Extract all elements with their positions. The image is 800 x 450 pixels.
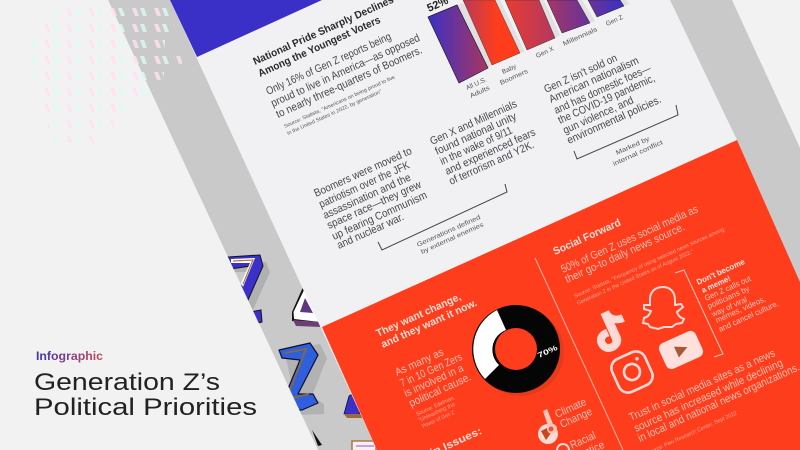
label: external enemies xyxy=(416,214,486,256)
bar labels: Gen X xyxy=(535,45,556,60)
text: Gen Z: and has domestic foes— xyxy=(552,63,653,117)
title: Political Priorities xyxy=(34,394,257,421)
icon: youtube xyxy=(657,329,705,371)
label: external enemies: by external enemies xyxy=(420,221,486,256)
text: Gen Z: gun violence, and xyxy=(561,95,636,137)
text: Boomers: patriotism over the JFK xyxy=(317,159,412,211)
text: Boomers xyxy=(312,145,429,252)
bar labels: Gen Z xyxy=(605,14,624,28)
title: Generation Z’s xyxy=(34,369,220,396)
source note: national pride: Source: Statista, "Americans on being proud to live xyxy=(283,75,396,130)
bar labels: All U.S. xyxy=(465,76,488,92)
bracket: social xyxy=(675,270,723,357)
icon: climate xyxy=(538,409,558,444)
source note: Edelman xyxy=(415,395,457,430)
icon: snapchat xyxy=(643,287,684,329)
text: Boomers: up fearing Communism xyxy=(330,189,429,243)
text: Gen X and Millennials: in the wake of 9/11 xyxy=(438,125,514,168)
text: social forward body: their go-to daily news source. xyxy=(563,221,687,286)
text: Boomers: space race—they grew xyxy=(325,179,423,232)
text: Gen X and Millennials: and experienced fears xyxy=(443,126,538,178)
infographic page background xyxy=(170,0,800,450)
text: climate change xyxy=(553,396,594,431)
text: national pride body: proud to live in America—as opposed xyxy=(269,32,422,110)
callout: don't become a meme: memes, videos, xyxy=(714,294,767,325)
text: Gen Z: American nationalism xyxy=(547,55,641,106)
text: Boomers: assassination and the xyxy=(321,172,413,222)
text: Gen X and Millennials: found national unity xyxy=(433,110,519,158)
text: Boomers: and nuclear war. xyxy=(335,211,406,252)
source note: Edelman: Power of Gen Z xyxy=(421,410,456,430)
heading: they want change: and they want it now. xyxy=(379,297,479,351)
bar labels: Baby xyxy=(501,63,518,76)
text: Gen X and Millennials: of terrorism and Y2K. xyxy=(447,139,536,188)
heading: social forward: Social Forward xyxy=(551,217,623,258)
text: climate change: Change xyxy=(558,406,594,431)
callout: don't become a meme xyxy=(695,257,780,334)
callout: don't become a meme: and cancel culture. xyxy=(717,299,780,334)
text: as many as: political cause. xyxy=(407,371,473,410)
left panel xyxy=(0,0,318,450)
Z letter decorations xyxy=(228,255,376,450)
callout: don't become a meme: way of viral xyxy=(709,295,749,319)
text: social forward body: 50% of Gen Z uses social media as xyxy=(559,203,700,276)
text: trust in social media: Trust in social media sites as a news xyxy=(627,347,778,424)
bracket: internal conflict xyxy=(574,105,678,159)
icon: instagram xyxy=(608,348,656,396)
bar labels: Millennials xyxy=(562,26,599,48)
text: national pride body: Only 16% of Gen Z reports being xyxy=(264,31,393,98)
label: internal conflict: Marked by xyxy=(615,135,651,157)
divider xyxy=(535,258,623,450)
bar labels: Adults xyxy=(469,84,492,100)
text: Gen X and Millennials xyxy=(428,98,538,188)
callout: don't become a meme: Gen Z calls out xyxy=(703,274,753,303)
text: national pride body: to nearly three-quarters of Boomers. xyxy=(274,44,424,121)
source note: national pride: in the United States in 2022, by generation" xyxy=(286,89,383,137)
text: as many as xyxy=(393,346,473,410)
callout: don't become a meme: politicians by xyxy=(706,284,751,311)
label: internal conflict xyxy=(612,135,664,168)
label: internal conflict: internal conflict xyxy=(612,139,664,168)
faint glitch pattern xyxy=(30,8,182,143)
text: Boomers: Boomers were moved to xyxy=(312,145,414,200)
text: as many as: 7 in 10 Gen Zers xyxy=(398,351,465,390)
source note: Edelman: "Unleashing the xyxy=(417,402,456,424)
text: trust in social media: source has increased while declining xyxy=(632,357,785,435)
panel: red section xyxy=(322,140,800,450)
text: Gen Z xyxy=(542,52,663,147)
source note: Edelman: Source: Edelman, xyxy=(415,395,457,418)
label: infographic: Infographic xyxy=(36,349,103,363)
callout: don't become a meme: a meme! xyxy=(700,274,732,295)
value label: 70% xyxy=(536,343,559,360)
bar chart xyxy=(425,0,630,83)
label: external enemies: Generations defined xyxy=(416,214,482,249)
text: Gen Z: Gen Z isn't sold on xyxy=(542,52,619,96)
text: climate change: Climate xyxy=(553,396,588,421)
title xyxy=(34,369,257,421)
donut chart xyxy=(472,305,564,396)
bar labels xyxy=(465,14,624,100)
text: as many as: As many as xyxy=(393,346,446,379)
heading: national pride: Among the Youngest Voters xyxy=(256,14,383,80)
callout: don't become a meme: Don't become xyxy=(695,257,747,287)
source note: Statista: Source: Statista, "Frequency of using selected news sources among xyxy=(573,227,725,300)
icon: racial justice xyxy=(557,444,569,450)
blue header band xyxy=(170,0,322,57)
text: Gen X and Millennials: Gen X and Millennials xyxy=(428,98,519,148)
text: as many as: is involved in a xyxy=(402,362,466,400)
heading: they want change: They want change, xyxy=(374,291,463,340)
icon: tiktok xyxy=(587,306,634,356)
bracket: external enemies xyxy=(378,184,507,250)
source note: Statista: Generation Z in the United States as of August 2022." xyxy=(576,249,695,307)
text: Gen Z: the COVID-19 pandemic, xyxy=(556,73,657,127)
text: Gen Z: environmental policies. xyxy=(565,94,663,147)
bar labels: Boomers xyxy=(499,68,530,87)
